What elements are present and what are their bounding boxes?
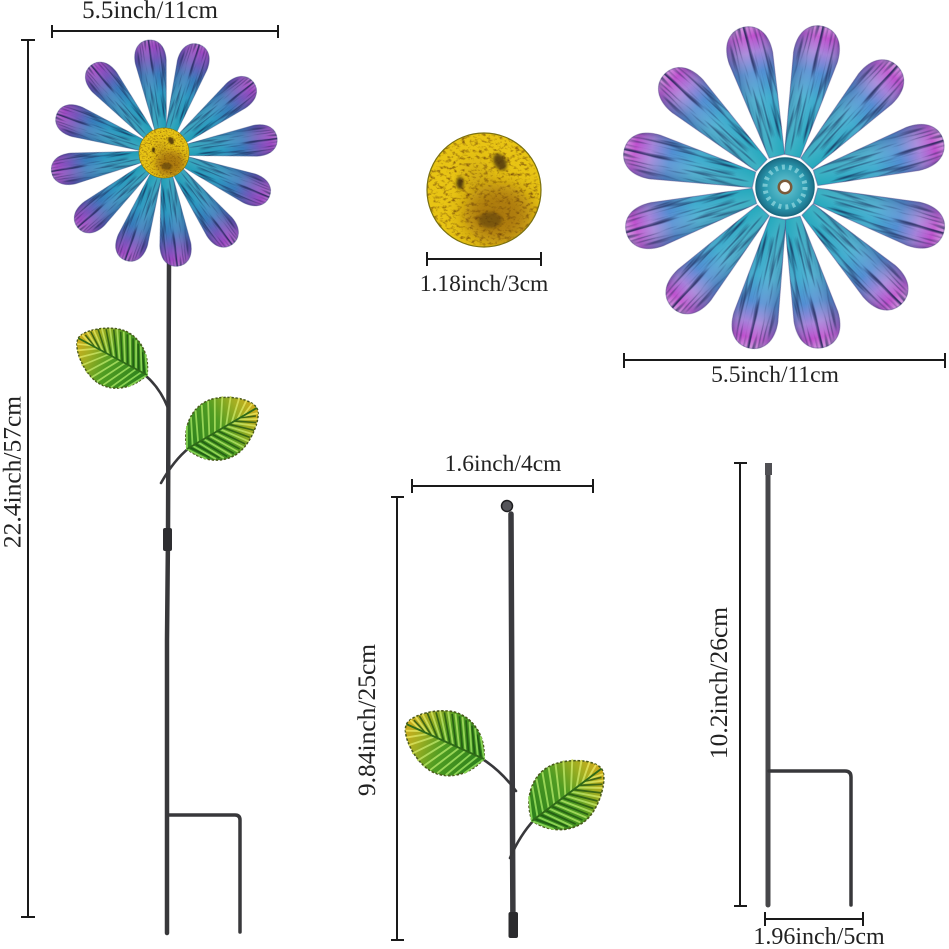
dimension: disc diameter	[420, 252, 548, 297]
leaf branches	[484, 760, 534, 858]
dimension: leaf spread	[412, 451, 593, 493]
leaf branches	[146, 376, 189, 483]
gold centre disc	[427, 133, 541, 247]
dimension: disc diameter: 1.18inch/3cm	[420, 271, 548, 297]
ground stake with fork	[765, 463, 851, 905]
stem rod	[502, 500, 518, 938]
textured hub with hole	[756, 158, 814, 216]
dimension: rear flower width	[624, 353, 945, 388]
main stem and ground fork	[163, 262, 240, 933]
dimension: stake height	[704, 463, 747, 906]
right leaf	[512, 742, 621, 847]
full stake assembled	[49, 38, 279, 933]
rear view of flower	[619, 21, 949, 353]
dimension: stake height: 10.2inch/26cm	[704, 607, 733, 759]
left leaf	[393, 696, 497, 789]
left leaf	[64, 313, 161, 402]
dimension: upper stem height: 9.84inch/25cm	[352, 644, 381, 796]
daisy flower head	[49, 38, 279, 268]
dimension: total height	[0, 40, 35, 917]
dimension: upper stem height	[352, 497, 404, 940]
dimension: fork width	[753, 912, 885, 949]
dimension: leaf spread: 1.6inch/4cm	[445, 451, 561, 477]
right leaf	[171, 381, 272, 475]
dimension: rear flower width: 5.5inch/11cm	[711, 362, 839, 388]
upper stem piece with leaves	[393, 500, 621, 938]
dimension: flower width	[52, 0, 278, 38]
